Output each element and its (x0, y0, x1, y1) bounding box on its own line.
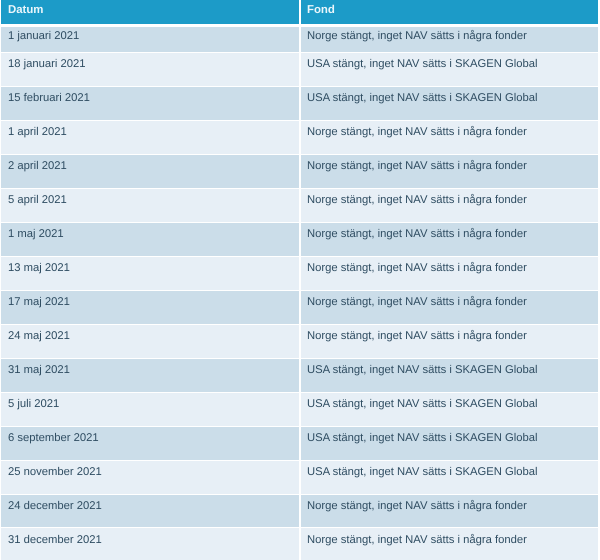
row 6 date (1, 189, 299, 222)
row 13 date (1, 427, 299, 460)
row 10 fund: Norge stängt, inget NAV sätts i några fonder (307, 330, 527, 342)
row 9 date (1, 291, 299, 324)
row 12 date (1, 393, 299, 426)
row 15 date (1, 495, 299, 527)
header: Fond: Fond (307, 4, 335, 16)
row 16 date (1, 528, 299, 560)
row 8 date: 13 maj 2021 (8, 262, 70, 274)
row 13 fund: USA stängt, inget NAV sätts i SKAGEN Global (307, 432, 538, 444)
row 13 fund (301, 427, 598, 460)
row 6 fund: Norge stängt, inget NAV sätts i några fonder (307, 194, 527, 206)
row 5 date: 2 april 2021 (8, 160, 67, 172)
row 16 fund (301, 528, 598, 560)
row 15 fund: Norge stängt, inget NAV sätts i några fonder (307, 500, 527, 512)
row 10 fund (301, 325, 598, 358)
row 15 date: 24 december 2021 (8, 500, 102, 512)
row 12 fund (301, 393, 598, 426)
row 3 fund: USA stängt, inget NAV sätts i SKAGEN Global (307, 92, 538, 104)
row 1 date (1, 27, 299, 52)
row 10 date: 24 maj 2021 (8, 330, 70, 342)
row 16 fund: Norge stängt, inget NAV sätts i några fonder (307, 534, 527, 546)
row 2 fund: USA stängt, inget NAV sätts i SKAGEN Global (307, 58, 538, 70)
row 11 fund (301, 359, 598, 392)
header: Datum: Datum (8, 4, 43, 16)
row 2 date (1, 53, 299, 86)
row 5 fund (301, 155, 598, 188)
row 11 fund: USA stängt, inget NAV sätts i SKAGEN Global (307, 364, 538, 376)
row 10 date (1, 325, 299, 358)
row 8 fund: Norge stängt, inget NAV sätts i några fonder (307, 262, 527, 274)
row 8 fund (301, 257, 598, 290)
row 14 fund: USA stängt, inget NAV sätts i SKAGEN Global (307, 466, 538, 478)
row 4 date: 1 april 2021 (8, 126, 67, 138)
row 16 date: 31 december 2021 (8, 534, 102, 546)
row 4 fund: Norge stängt, inget NAV sätts i några fonder (307, 126, 527, 138)
row 11 date: 31 maj 2021 (8, 364, 70, 376)
row 9 fund (301, 291, 598, 324)
row 4 date (1, 121, 299, 154)
row 5 fund: Norge stängt, inget NAV sätts i några fonder (307, 160, 527, 172)
row 7 fund: Norge stängt, inget NAV sätts i några fonder (307, 228, 527, 240)
row 9 date: 17 maj 2021 (8, 296, 70, 308)
row 7 date: 1 maj 2021 (8, 228, 64, 240)
row 1 fund: Norge stängt, inget NAV sätts i några fonder (307, 30, 527, 42)
row 14 date: 25 november 2021 (8, 466, 102, 478)
row 3 date (1, 87, 299, 120)
row 4 fund (301, 121, 598, 154)
row 12 fund: USA stängt, inget NAV sätts i SKAGEN Global (307, 398, 538, 410)
row 14 date (1, 461, 299, 494)
row 1 date: 1 januari 2021 (8, 30, 79, 42)
row 9 fund: Norge stängt, inget NAV sätts i några fonder (307, 296, 527, 308)
row 13 date: 6 september 2021 (8, 432, 99, 444)
row 7 date (1, 223, 299, 256)
row 11 date (1, 359, 299, 392)
row 6 fund (301, 189, 598, 222)
row 3 date: 15 februari 2021 (8, 92, 90, 104)
row 1 fund (301, 27, 598, 52)
row 15 fund (301, 495, 598, 527)
row 8 date (1, 257, 299, 290)
header: Fond (301, 0, 598, 24)
row 2 fund (301, 53, 598, 86)
row 3 fund (301, 87, 598, 120)
row 6 date: 5 april 2021 (8, 194, 67, 206)
row 12 date: 5 juli 2021 (8, 398, 59, 410)
row 2 date: 18 januari 2021 (8, 58, 86, 70)
row 7 fund (301, 223, 598, 256)
header: Datum (1, 0, 299, 24)
row 14 fund (301, 461, 598, 494)
row 5 date (1, 155, 299, 188)
